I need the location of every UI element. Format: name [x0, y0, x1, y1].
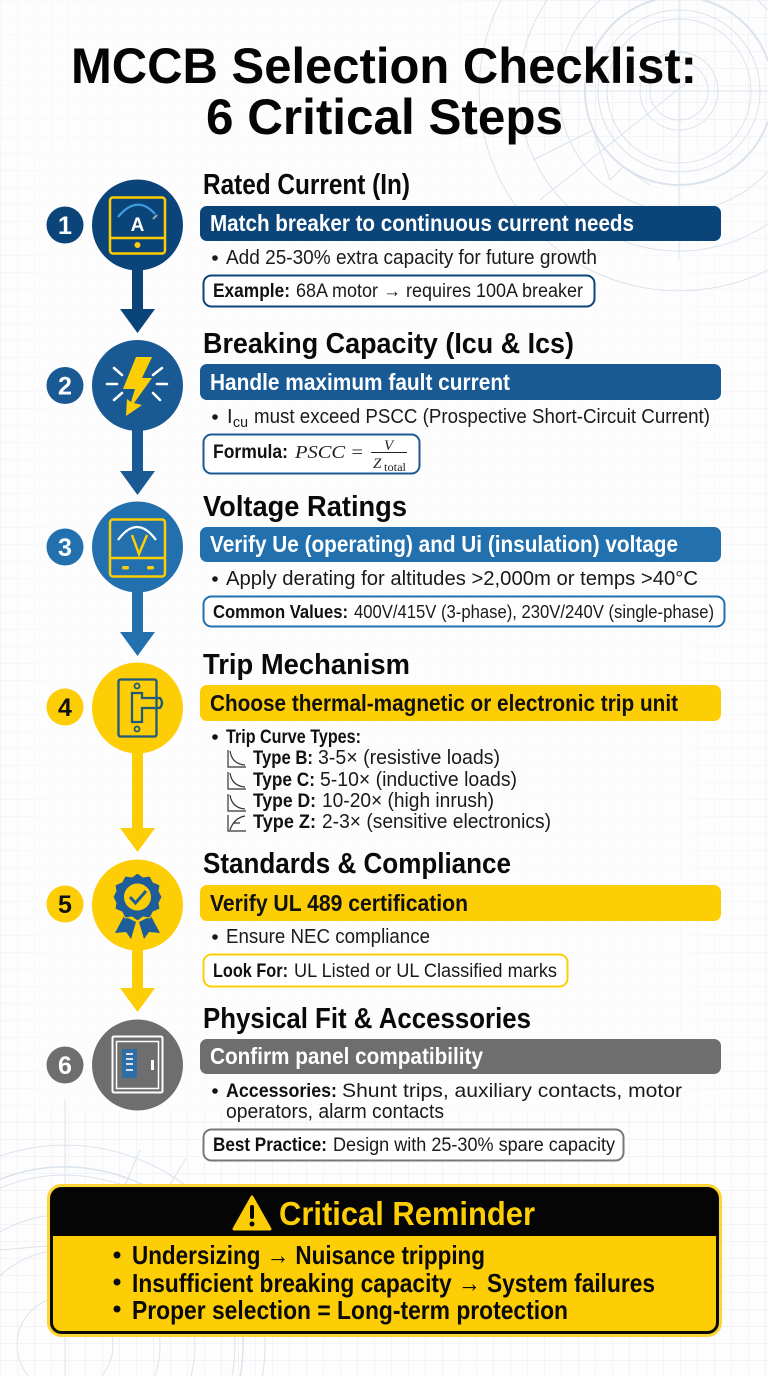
callout: best practice: Design with 25-30% spare capacity: [333, 1135, 615, 1156]
icon: ammeter: [92, 180, 183, 270]
step 4: trip mechanism: [46, 649, 721, 833]
bullet: operators, alarm contacts: [226, 1101, 444, 1123]
step 3: voltage ratings: [46, 491, 724, 626]
banner: [200, 1039, 721, 1074]
icon: ammeter: A: [131, 215, 145, 236]
bullet: cu: [233, 414, 248, 431]
banner: Verify UL 489 certification: [210, 890, 468, 916]
title: MCCB Selection Checklist:: [71, 38, 697, 94]
callout: formula: V: [384, 438, 395, 454]
callout: formula: total: [384, 460, 407, 474]
step 6: physical fit and accessories: [46, 1003, 721, 1160]
number badge 5: [46, 886, 84, 922]
title: [71, 38, 697, 145]
banner: Confirm panel compatibility: [210, 1043, 483, 1069]
banner: Match breaker to continuous current needs: [210, 210, 634, 236]
reminder bullets: [114, 1240, 655, 1325]
number badge 4: [46, 688, 84, 726]
trip curve list: Type C:: [253, 770, 315, 791]
heading: Voltage Ratings: [203, 491, 407, 523]
banner: Verify Ue (operating) and Ui (insulation) voltage: [210, 531, 678, 557]
callout: example: Example:: [213, 281, 290, 302]
bullet: Ensure NEC compliance: [226, 926, 430, 948]
arrow: step 3 to 4: [120, 591, 155, 656]
trip curve list: Type D:: [253, 791, 316, 812]
bullet: Add 25-30% extra capacity for future growth: [226, 247, 597, 269]
heading: Trip Mechanism: [203, 649, 410, 681]
heading: Breaking Capacity (Icu & Ics): [203, 328, 574, 360]
callout: example: 68A motor → requires 100A breaker: [296, 281, 584, 302]
trip curve list: 5-10× (inductive loads): [320, 769, 517, 791]
reminder bullets: Insufficient breaking capacity → System failures: [132, 1268, 655, 1298]
callout: common values: 400V/415V (3-phase), 230V/240V (single-phase): [354, 602, 714, 622]
number badge 4: 4: [58, 694, 72, 722]
banner: [200, 364, 721, 400]
number badge 1: [46, 206, 84, 244]
arrow: step 5 to 6: [120, 948, 155, 1012]
icon: warning triangle: [234, 1197, 270, 1229]
callout: look for: Look For:: [213, 961, 288, 982]
callout: common values: Common Values:: [213, 602, 348, 622]
banner: Handle maximum fault current: [210, 369, 510, 395]
number badge 3: [46, 528, 84, 566]
arrow: step 1 to 2: [120, 268, 155, 333]
step 5: standards and compliance: [46, 848, 721, 986]
callout: formula: [204, 434, 420, 474]
icon: curve B: [228, 750, 246, 767]
callout: common values: [204, 596, 724, 626]
banner: [200, 885, 721, 921]
arrow: step 4 to 5: [120, 751, 155, 852]
icon: breaker switch: [92, 662, 183, 754]
title: 6 Critical Steps: [206, 89, 563, 145]
icon: lightning bolt: [92, 340, 183, 431]
number badge 3: 3: [58, 534, 72, 562]
icon: panel enclosure: [92, 1020, 183, 1110]
banner: [200, 206, 721, 241]
bullet: Apply derating for altitudes >2,000m or temps >40°C: [226, 568, 698, 590]
number badge 6: 6: [58, 1052, 72, 1080]
arrow: step 2 to 3: [120, 429, 155, 495]
number badge 2: [46, 367, 84, 404]
callout: look for: UL Listed or UL Classified marks: [294, 961, 557, 982]
trip curve list: 2-3× (sensitive electronics): [322, 811, 551, 833]
trip curve list: Type B:: [253, 748, 313, 769]
callout: formula: Z: [373, 456, 382, 472]
icon: voltmeter: [92, 502, 183, 592]
callout: best practice: Best Practice:: [213, 1135, 327, 1156]
trip curve list: [212, 727, 551, 833]
number badge 1: 1: [58, 212, 72, 240]
icon: certification rosette: [92, 860, 183, 950]
heading: Standards & Compliance: [203, 848, 511, 880]
bullet: I: [227, 406, 233, 428]
icon: curve Z: [228, 815, 246, 831]
callout: formula: PSCC =: [294, 442, 364, 462]
number badge 2: 2: [58, 372, 72, 400]
reminder bullets: Undersizing → Nuisance tripping: [132, 1240, 485, 1270]
reminder heading: Critical Reminder: [279, 1195, 535, 1232]
trip curve list: 3-5× (resistive loads): [318, 747, 500, 769]
trip curve list: 10-20× (high inrush): [322, 790, 494, 812]
banner: Choose thermal-magnetic or electronic trip unit: [210, 690, 678, 716]
step 2: breaking capacity: [46, 328, 721, 474]
heading: Rated Current (In): [203, 169, 410, 201]
number badge 5: 5: [58, 891, 72, 919]
bullet: Accessories:: [226, 1081, 337, 1102]
panel: critical reminder: [48, 1186, 720, 1336]
bullet: must exceed PSCC (Prospective Short-Circuit Current): [254, 406, 710, 428]
bullet: [212, 1080, 683, 1123]
callout: best practice: [204, 1130, 624, 1160]
number badge 6: [46, 1046, 84, 1084]
trip curve list: Trip Curve Types:: [226, 727, 361, 748]
icon: curve D: [228, 794, 246, 811]
step 1: rated current: [46, 169, 721, 306]
trip curve list: Type Z:: [253, 812, 316, 833]
callout: look for: [204, 954, 568, 986]
callout: example: [204, 276, 594, 306]
reminder bullets: Proper selection = Long-term protection: [132, 1295, 568, 1325]
heading: Physical Fit & Accessories: [203, 1003, 531, 1035]
callout: formula: Formula:: [213, 442, 288, 463]
bullet: Shunt trips, auxiliary contacts, motor: [342, 1080, 683, 1102]
icon: curve C: [228, 772, 246, 789]
